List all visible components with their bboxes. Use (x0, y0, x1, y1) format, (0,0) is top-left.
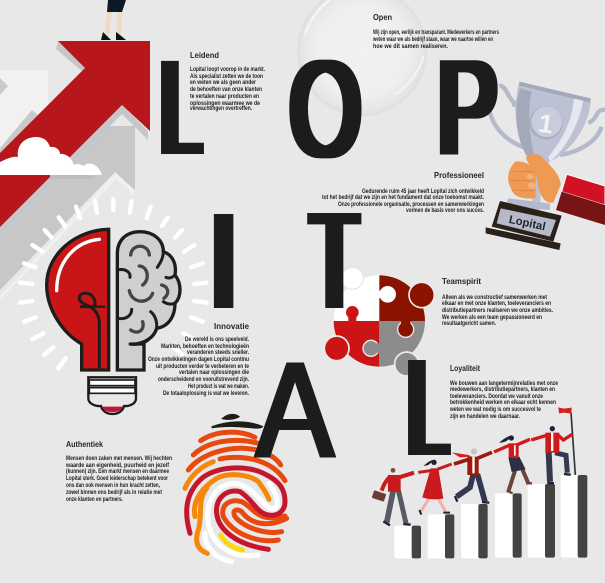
body: Innovatie: Onze ontwikkelingen dagen Lopital continu (148, 357, 249, 363)
body: Leidend: de behoeften van onze klanten (190, 87, 262, 93)
body: Innovatie: Markten, behoeften en technologieën (161, 344, 249, 350)
body: Innovatie: vertalen naar oplossingen die (179, 370, 250, 376)
bars (394, 475, 587, 558)
red bulb half (47, 229, 109, 370)
body: Loyaliteit: toeleveranciers. Doordat we vanuit onze (450, 394, 544, 400)
illustration: light bulb and brain (20, 199, 207, 414)
letter A: A (256, 333, 334, 486)
climber 4 in navy skirt (494, 435, 532, 493)
body: Professioneel: tot het bedrijf dat we zijn en het fundament dat onze toekomst maakt. (322, 195, 484, 201)
letter T: T (311, 185, 358, 337)
body: Innovatie (148, 337, 250, 397)
letter P: P (438, 34, 497, 183)
body: Authentiek: zowel binnen ons bedrijf als in relatie met (66, 490, 162, 496)
heading: Leidend: Leidend (190, 50, 219, 60)
big letters: LOPITAL (161, 32, 497, 486)
rays (20, 199, 207, 368)
body: Professioneel: Gedurende ruim 45 jaar heeft Lopital zich ontwikkeld (362, 189, 484, 195)
heading: Open: Open (373, 12, 392, 22)
text block: Innovatie (148, 321, 250, 397)
heading: Professioneel: Professioneel (434, 170, 484, 180)
sleeve (562, 174, 605, 205)
illustration: team climbing bars (372, 407, 587, 558)
brain half (117, 232, 180, 370)
climber 2 in red dress (418, 460, 452, 515)
text block: Open (372, 12, 499, 50)
body: Authentiek (65, 456, 172, 503)
climber 3 with scarf (452, 448, 492, 503)
body: Innovatie: De totaaloplossing is wat we leveren. (163, 391, 249, 397)
body: Loyaliteit: medewerkers, distributiepartners, klanten en (450, 387, 555, 393)
body: Loyaliteit: weten we wat nodig is om succesvol te (449, 407, 542, 413)
illustration: woman's legs on arrow (101, 0, 126, 40)
text block: Authentiek (65, 439, 172, 503)
illustration: glass bubble (297, 0, 427, 116)
body: Leidend: Als specialist zetten we de toon (190, 74, 263, 80)
body: Teamspirit: distributiepartners realiseren we onze ambities. (442, 308, 553, 314)
climber 5 leading (531, 426, 573, 483)
body: Open: hoe we dit samen realiseren. (373, 44, 448, 50)
text block: Professioneel (322, 170, 484, 214)
red arrow (0, 41, 150, 227)
letter O: O (290, 32, 361, 185)
body: Teamspirit: Alleen als we constructief samenwerken met (442, 295, 547, 301)
body: Loyaliteit: We bouwen aan langetermijnrelaties met onze (450, 381, 559, 387)
body: Loyaliteit: betrokkenheid werken en elkaar echt kennen (450, 400, 556, 406)
illustration: rising arrows with cloud (0, 41, 150, 300)
body: Leidend: verwachtingen overtreffen. (190, 106, 252, 112)
flag (558, 407, 575, 475)
body: Teamspirit: resultaatgericht samen. (442, 321, 496, 327)
body: Innovatie: onderscheidend en vooruitstrevend zijn. (158, 377, 249, 383)
body: Leidend (190, 67, 265, 112)
illustration: trophy held by hand: 1 (537, 108, 555, 140)
illustration: puzzle circle (324, 267, 434, 376)
body: Authentiek: Mensen doen zaken met mensen. Wij hechten (66, 456, 172, 462)
hand (526, 154, 561, 203)
body: Leidend: te vertalen naar producten en (190, 94, 259, 100)
body: Authentiek: waarde aan eigenheid, puurheid en jezelf (65, 463, 170, 469)
letter L: L (408, 332, 448, 484)
body: Leidend: oplossingen waarmee we de (190, 101, 261, 107)
text block: Loyaliteit (449, 363, 559, 420)
cup (516, 82, 591, 210)
body: Loyaliteit (449, 381, 559, 420)
letter I: I (205, 184, 242, 337)
lamp base (88, 377, 136, 414)
body: Teamspirit (442, 295, 553, 327)
body: Loyaliteit: zijn en handelen we daarnaar. (450, 414, 520, 420)
body: Innovatie: uit producten verder te verbeteren en te (156, 364, 250, 370)
text block: Leidend (190, 50, 265, 112)
plaque (492, 201, 562, 242)
letter L: L (161, 33, 201, 182)
body: Innovatie: veranderen steeds sneller. (187, 350, 249, 356)
body: Teamspirit: elkaar en met onze klanten, toeleveranciers en (442, 301, 551, 307)
body: Open: weten waar we als bedrijf staan, waar we naartoe willen en (372, 37, 493, 43)
heading: Loyaliteit: Loyaliteit (450, 363, 480, 373)
heading: Authentiek: Authentiek (66, 439, 103, 449)
climber 1 with briefcase (372, 468, 414, 525)
body: Authentiek: ons dan ook mensen in hun kracht zetten, (66, 483, 160, 489)
plaque label: Lopital (508, 214, 547, 233)
body: Open: Wij zijn open, eerlijk en transparant. Medewerkers en partners (373, 30, 499, 36)
body: Authentiek: Lopital sterk. Goed leiderschap betekent voor (66, 476, 169, 482)
heading: Teamspirit: Teamspirit (442, 276, 481, 286)
body: Authentiek: onze klanten en partners. (66, 497, 123, 503)
body: Professioneel: Onze professionele organisatie, processen en samenwerkingen (338, 202, 484, 208)
body: Professioneel: vormen de basis voor ons succes. (406, 208, 484, 214)
body: Open (372, 30, 499, 50)
body: Leidend: Lopital loopt voorop in de markt. (190, 67, 265, 73)
text block: Teamspirit (442, 276, 553, 327)
body: Professioneel (322, 189, 484, 214)
body: Authentiek: (kunnen) zijn. Een markt mensen en daarmee (66, 469, 170, 475)
illustration: fingerprint (185, 415, 287, 562)
heading: Innovatie: Innovatie (214, 321, 249, 331)
body: Innovatie: Het product is wat we maken. (188, 384, 249, 390)
body: Teamspirit: We werken als een team gepassioneerd en (442, 315, 542, 321)
illustration: trophy held by hand (486, 82, 605, 250)
body: Leidend: en weten we als geen ander (190, 80, 257, 86)
handles (489, 86, 527, 148)
cloud (0, 137, 102, 179)
body: Innovatie: De wereld is ons speelveld. (185, 337, 249, 343)
